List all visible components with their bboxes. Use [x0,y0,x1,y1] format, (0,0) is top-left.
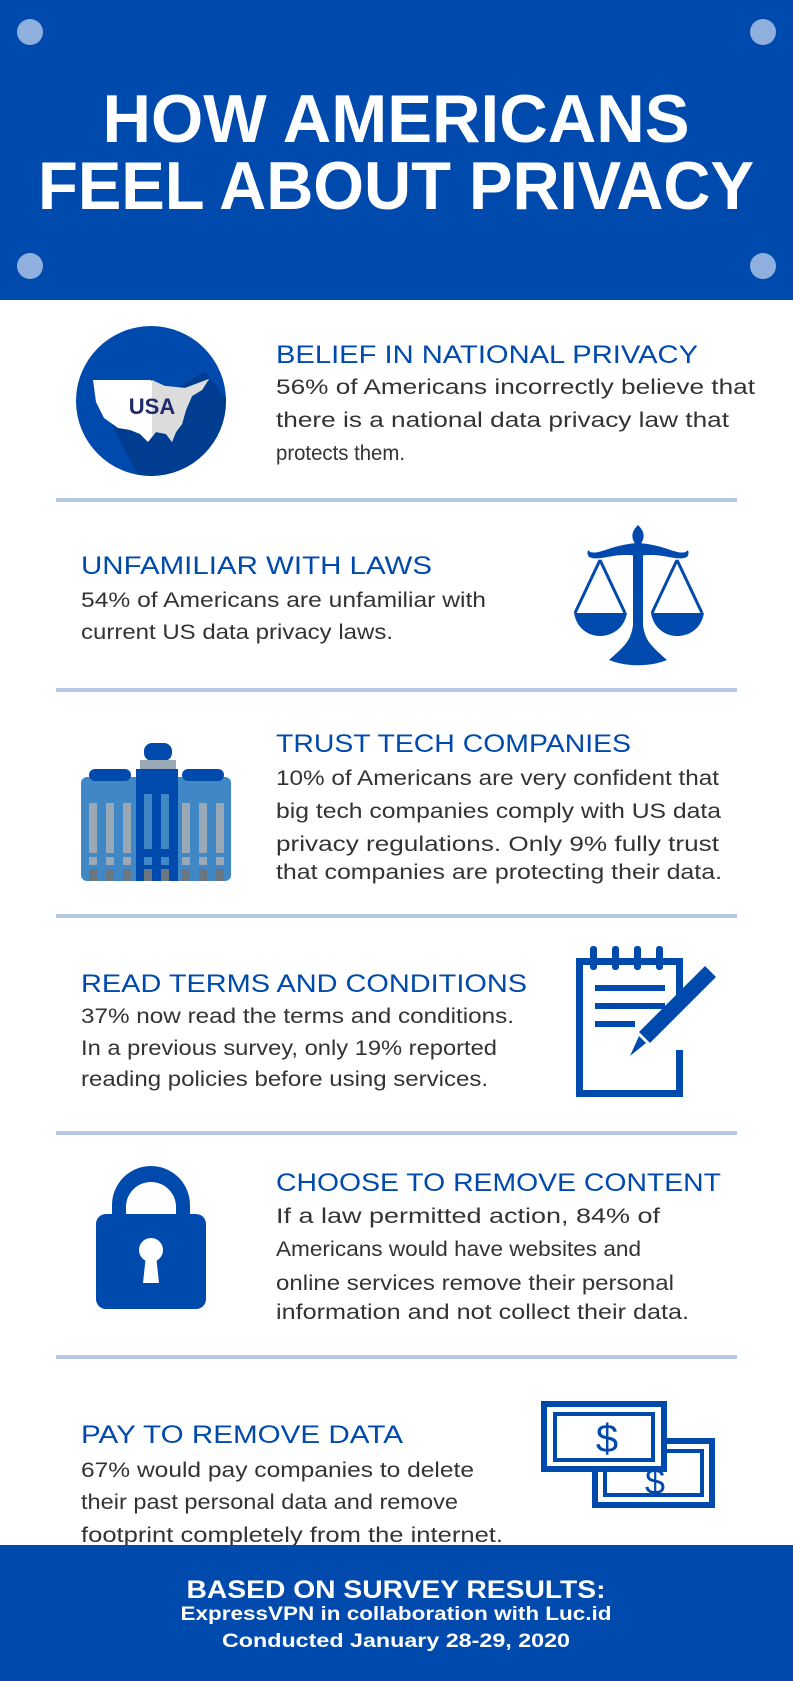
footer [0,1545,793,1681]
icon: building [81,743,231,881]
section 3 text: 10% of Americans are very confident that [276,767,719,790]
icon: money bills: $ [645,1461,665,1502]
section 1 text: 56% of Americans incorrectly believe that [276,376,755,399]
section 6 text: 67% would pay companies to delete [81,1459,474,1482]
title: FEEL ABOUT PRIVACY [38,148,754,224]
section 6 text: footprint completely from the internet. [81,1524,503,1547]
section 3 text: that companies are protecting their data. [276,861,722,884]
section 1 text: BELIEF IN NATIONAL PRIVACY [276,341,698,369]
icon: scales [574,525,704,665]
icon: USA circle: USA [129,394,175,419]
section 6 text: their past personal data and remove [81,1491,458,1514]
title: HOW AMERICANS [102,81,690,157]
section 3 text [276,730,722,884]
header banner [0,0,793,300]
section 3 text: big tech companies comply with US data [276,800,721,823]
section 5 text: CHOOSE TO REMOVE CONTENT [276,1169,721,1197]
section 1 text: there is a national data privacy law that [276,409,729,432]
section 1 text: protects them. [276,442,405,465]
section 2 text [81,552,486,644]
section 6 text [81,1421,503,1547]
section 4 text: In a previous survey, only 19% reported [81,1037,497,1060]
section 5 text: online services remove their personal [276,1272,674,1295]
section 4 text: 37% now read the terms and conditions. [81,1005,514,1028]
section 2 text: current US data privacy laws. [81,621,393,644]
title [38,81,754,224]
footer: Conducted January 28-29, 2020 [222,1631,570,1652]
icon: notepad [576,946,716,1097]
section 4 text: reading policies before using services. [81,1068,488,1091]
icon: USA circle [76,326,226,476]
section 4 text [81,970,527,1091]
section 1 text [276,341,755,465]
section 5 text: If a law permitted action, 84% of [276,1205,660,1228]
footer: ExpressVPN in collaboration with Luc.id [180,1604,612,1625]
footer: BASED ON SURVEY RESULTS: [186,1576,606,1604]
section 2 text: 54% of Americans are unfamiliar with [81,589,486,612]
icon: money bills: $ [596,1417,618,1461]
section 4 text: READ TERMS AND CONDITIONS [81,970,527,998]
section 3 text: privacy regulations. Only 9% fully trust [276,833,719,856]
section 3 text: TRUST TECH COMPANIES [276,730,631,758]
section 5 text: Americans would have websites and [276,1238,641,1261]
icon: money bills [544,1404,712,1505]
section 6 text: PAY TO REMOVE DATA [81,1421,403,1449]
section 2 text: UNFAMILIAR WITH LAWS [81,552,432,580]
section 5 text: information and not collect their data. [276,1301,689,1324]
icon: padlock [96,1166,206,1309]
section 5 text [276,1169,721,1324]
